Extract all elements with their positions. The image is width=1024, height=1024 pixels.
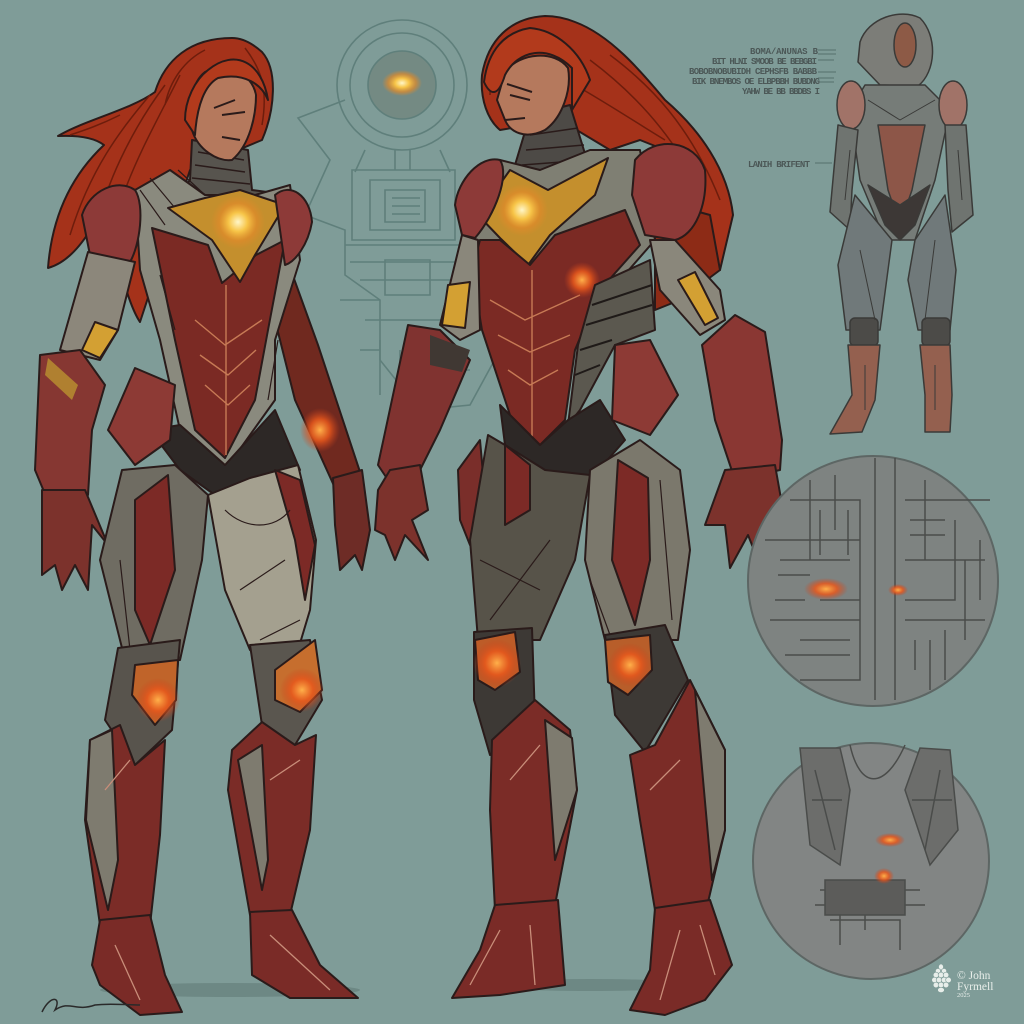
left figure xyxy=(35,38,370,1015)
left figure torso seams xyxy=(195,285,262,455)
right figure hair strands xyxy=(490,30,720,200)
right figure chest reactor xyxy=(496,184,548,236)
left figure left shin side xyxy=(86,730,118,910)
left figure face xyxy=(191,68,256,160)
right figure neck bands xyxy=(522,128,588,165)
right figure left knee xyxy=(474,628,535,755)
left figure neck xyxy=(170,140,290,215)
left figure right knee glow xyxy=(280,668,324,712)
right figure gauntlet cuff xyxy=(430,335,470,372)
left figure left thigh xyxy=(100,465,208,660)
right figure right hip plate xyxy=(612,340,678,435)
right figure hair front lock xyxy=(484,28,590,110)
left figure left shin xyxy=(85,725,165,925)
right figure left shoulder xyxy=(455,159,503,238)
left figure left kneecap xyxy=(132,660,178,725)
left figure right knee xyxy=(250,640,322,745)
inset waist xyxy=(868,185,930,240)
top annotation block: BIT HLNI SMOOB BE BEBGBI xyxy=(712,57,817,67)
right figure left kneecap xyxy=(475,632,520,690)
artist signature xyxy=(42,999,140,1012)
left figure right hand xyxy=(333,470,370,570)
right figure right knee xyxy=(605,625,688,752)
annotation leader lines xyxy=(818,50,836,82)
watermark text xyxy=(957,970,993,999)
left figure hair front lock xyxy=(185,60,268,135)
left figure gold chest plate xyxy=(168,190,285,282)
left figure right kneecap xyxy=(275,640,322,712)
lower circle machinery xyxy=(800,745,958,950)
left figure left gauntlet xyxy=(35,350,105,518)
inset helmet xyxy=(858,14,933,86)
right figure ribbed side armor xyxy=(568,260,655,425)
left figure left knee xyxy=(105,640,180,765)
left figure red torso xyxy=(152,228,285,458)
left figure neck bands xyxy=(192,152,250,184)
left figure left knee glow xyxy=(136,678,180,722)
right figure boot seams xyxy=(470,745,715,1000)
upper circle glows xyxy=(804,578,908,600)
right figure side glow xyxy=(564,262,600,298)
right figure left thigh xyxy=(470,435,590,640)
left figure facial features xyxy=(214,100,245,140)
left figure right arm xyxy=(270,240,362,488)
right figure right thigh xyxy=(585,440,690,640)
right figure grey chest xyxy=(470,150,655,280)
top annotation block: BOBOBNOBUBIDH CEPHSFB BABBB xyxy=(689,67,818,77)
background schematic xyxy=(298,20,500,410)
right figure left upper arm xyxy=(440,235,480,340)
right figure left hip plate xyxy=(458,440,488,545)
watermark text: 2025 xyxy=(957,992,970,999)
right figure right kneecap xyxy=(605,635,652,695)
left figure left upper arm xyxy=(60,252,135,360)
right figure right shin xyxy=(630,680,725,915)
left figure thigh seams xyxy=(120,510,300,650)
top annotation block: BOMA/ANUNAS B xyxy=(750,47,819,57)
top annotation block xyxy=(689,47,820,97)
left figure hips xyxy=(150,410,300,495)
right figure left gauntlet xyxy=(378,325,470,480)
right figure right shoulder xyxy=(632,144,705,240)
right figure hair xyxy=(482,16,733,270)
top annotation block: YAHW BE BB BBDBS I xyxy=(742,87,820,97)
inset arms xyxy=(830,125,973,232)
right figure right hand xyxy=(705,465,783,568)
left figure right shoulder xyxy=(275,190,312,265)
right figure left shin xyxy=(490,700,577,910)
right figure left thigh panel xyxy=(505,445,530,525)
left figure right thigh xyxy=(208,465,316,660)
left figure right shin side xyxy=(238,745,268,890)
inset detail lines xyxy=(845,100,962,410)
right figure thigh seams xyxy=(480,480,672,635)
inset lower legs xyxy=(830,345,952,434)
left figure boot seams xyxy=(105,760,330,1000)
right figure hips xyxy=(500,400,625,480)
inset legs xyxy=(838,195,956,330)
right figure left arm gold band xyxy=(442,282,470,328)
right figure left hand xyxy=(375,465,428,560)
inset visor xyxy=(894,23,916,67)
right figure right boot xyxy=(630,900,732,1015)
left figure left shoulder xyxy=(82,185,140,262)
left figure hair strands xyxy=(70,48,264,235)
left figure right thigh panel xyxy=(275,470,315,600)
inset chest panel xyxy=(878,125,925,225)
ground shadows xyxy=(100,979,700,997)
watermark pinecone icon xyxy=(932,964,951,993)
left figure chest armor xyxy=(135,170,300,470)
left figure left hand xyxy=(42,490,108,590)
left figure chest plate lines xyxy=(140,170,300,400)
left figure gauntlet accent xyxy=(45,358,78,400)
right figure right gauntlet xyxy=(702,315,782,480)
left figure right boot xyxy=(250,910,358,998)
upper circle machinery xyxy=(765,458,990,700)
detail circle upper xyxy=(748,456,998,706)
right figure left shin side xyxy=(545,720,577,860)
left figure chest reactor xyxy=(211,195,265,249)
inset torso xyxy=(850,85,950,240)
left figure right shin xyxy=(228,722,316,915)
inset figure xyxy=(830,14,973,434)
lower circle glows xyxy=(874,833,905,884)
right figure neck xyxy=(515,105,590,185)
watermark text: © John xyxy=(957,970,991,982)
right figure rib lines xyxy=(575,285,652,375)
side annotation: LANIH BRIFENT xyxy=(748,160,811,170)
left figure hip plate xyxy=(108,368,175,465)
right figure left boot xyxy=(452,900,565,998)
right figure xyxy=(375,16,783,1015)
right figure left knee glow xyxy=(473,639,521,687)
right figure torso seams xyxy=(490,270,580,440)
right figure facial features xyxy=(505,84,532,120)
left figure forearm glow xyxy=(300,408,340,452)
left figure hair xyxy=(48,38,273,322)
right figure red torso xyxy=(472,210,640,445)
right figure lower hair xyxy=(655,200,720,310)
left figure left thigh panel xyxy=(135,475,175,645)
inset knees xyxy=(850,318,950,346)
right figure right shin side xyxy=(695,690,725,880)
left figure arm gold band xyxy=(82,322,118,358)
top annotation block: BIK BNEMBOS OE ELBPBBH BUBDNG xyxy=(692,77,820,87)
detail circle lower xyxy=(753,743,989,979)
right figure right upper arm xyxy=(650,240,725,335)
right figure gold chest plate xyxy=(478,158,608,265)
inset shoulders xyxy=(837,81,967,129)
right figure right thigh panel xyxy=(612,460,650,625)
watermark text: Fyrmell xyxy=(957,981,993,993)
right figure right knee glow xyxy=(608,643,652,687)
left figure left boot xyxy=(92,915,182,1015)
right figure face xyxy=(497,56,569,135)
right figure right arm gold band xyxy=(678,272,718,325)
